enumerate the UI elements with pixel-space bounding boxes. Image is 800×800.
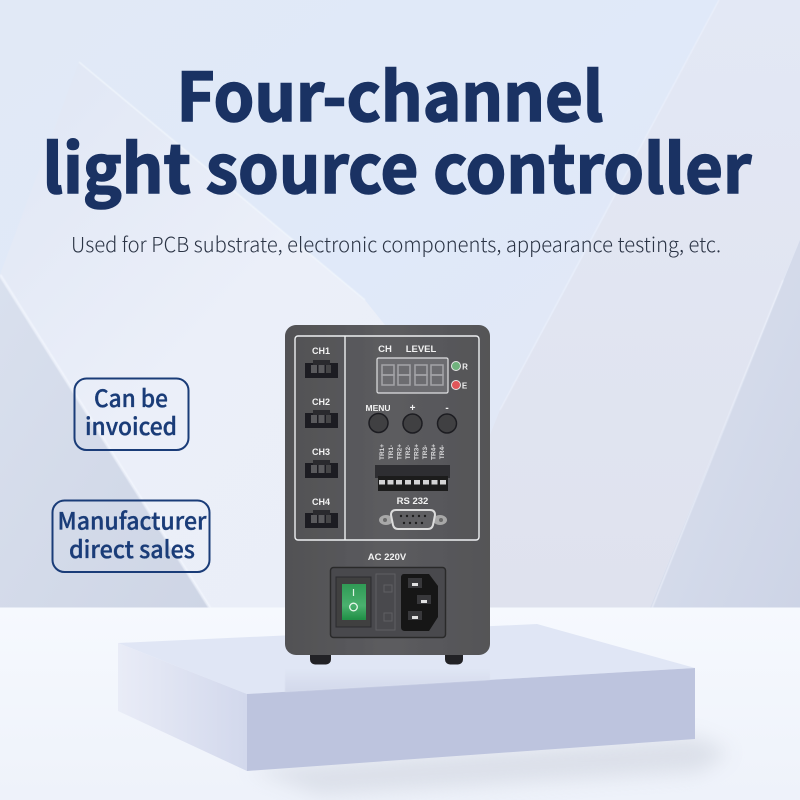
- channel labels: [312, 346, 330, 507]
- channel connectors: [305, 360, 338, 528]
- subtitle: Used for PCB substrate, electronic components, appearance testing, etc.: [71, 228, 721, 258]
- button labels: +: [410, 403, 416, 414]
- CH and LEVEL headings: CH: [378, 344, 392, 355]
- power module: [330, 568, 446, 638]
- IEC power socket: [401, 574, 438, 631]
- terminal labels: TR1+: [379, 444, 386, 460]
- AC 220V label: AC 220V: [368, 552, 407, 563]
- fuse holder: [376, 574, 395, 630]
- RS 232 label: RS 232: [397, 496, 428, 507]
- button labels: [365, 403, 449, 414]
- badge: manufacturer direct sales: Manufacturer: [58, 502, 207, 536]
- device body: [285, 325, 490, 655]
- channel labels: CH3: [312, 447, 330, 457]
- terminal labels: TR3+: [414, 444, 420, 460]
- terminal labels: TR1-: [388, 445, 395, 459]
- front panel outline: [295, 336, 479, 540]
- title: [42, 44, 752, 213]
- status LEDs: [452, 362, 468, 390]
- terminal labels: [379, 444, 446, 460]
- button labels: -: [445, 403, 449, 414]
- device feet: [310, 650, 463, 664]
- badge: manufacturer direct sales: [52, 500, 210, 572]
- status LEDs: R: [462, 362, 468, 372]
- digital display: [377, 358, 448, 393]
- CH and LEVEL headings: [378, 344, 436, 355]
- CH and LEVEL headings: LEVEL: [406, 344, 436, 355]
- terminal labels: TR4-: [439, 445, 446, 459]
- badge: can be invoiced: invoiced: [85, 407, 177, 442]
- floor: [0, 608, 800, 800]
- badge: can be invoiced: Can be: [94, 379, 168, 414]
- controller device: [285, 325, 490, 664]
- terminal labels: TR4+: [430, 444, 438, 460]
- terminal labels: TR2+: [396, 444, 404, 460]
- buttons: [369, 414, 456, 433]
- terminal labels: TR2-: [405, 445, 412, 459]
- title: Four-channel: [176, 44, 604, 141]
- platform: display pedestal: [118, 624, 730, 795]
- title: light source controller: [42, 116, 752, 213]
- channel labels: CH2: [312, 397, 330, 407]
- badge: can be invoiced: [74, 378, 188, 450]
- button labels: MENU: [365, 403, 391, 413]
- terminal block: [375, 465, 450, 491]
- channel labels: CH1: [312, 346, 330, 356]
- channel labels: CH4: [312, 497, 330, 507]
- status LEDs: E: [462, 382, 468, 390]
- serial port: [379, 510, 447, 529]
- background: geometric light panels: [0, 0, 800, 608]
- badge: manufacturer direct sales: direct sales: [69, 530, 195, 565]
- terminal labels: TR3-: [422, 445, 429, 459]
- rocker switch: [336, 577, 371, 627]
